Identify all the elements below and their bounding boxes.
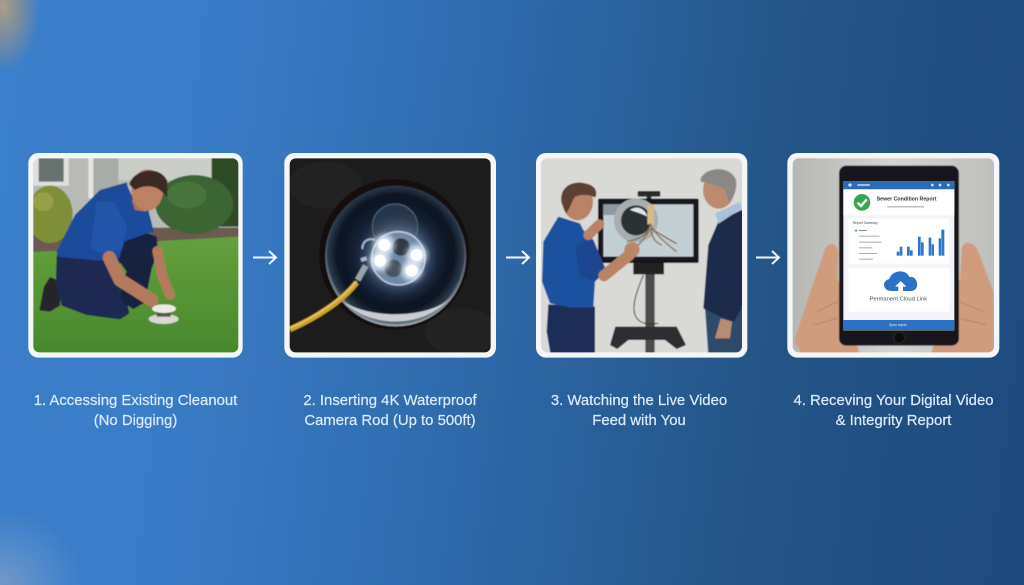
tablet screen: Report Summary (853, 221, 878, 225)
tablet screen (843, 181, 954, 330)
bar chart (897, 230, 944, 256)
caption: step 4: & Integrity Report (836, 413, 951, 429)
caption: step 2 (303, 393, 477, 429)
panel: step 4 digital report on tablet (787, 153, 999, 358)
cloud icon (884, 271, 917, 291)
caption: step 3 (551, 393, 727, 429)
cloud link label: Permanent Cloud Link (869, 297, 927, 303)
tablet body (839, 166, 959, 346)
caption: step 2: Camera Rod (Up to 500ft) (304, 413, 476, 429)
LED lights (370, 235, 427, 281)
shirt (57, 182, 154, 261)
green check (854, 194, 870, 211)
cloud link card (848, 268, 949, 312)
caption: step 4 (793, 393, 994, 429)
summary card (848, 218, 949, 264)
hands (794, 244, 860, 355)
panel: step 2 camera in pipe (284, 153, 498, 358)
tablet screen: Open report (889, 323, 907, 327)
arrow 3 (756, 251, 779, 264)
caption: step 1 (34, 393, 238, 429)
screen header (843, 181, 954, 189)
screen footer (843, 320, 954, 330)
report title: Sewer Condition Report (877, 196, 937, 202)
trousers (56, 255, 129, 319)
client (705, 308, 743, 355)
arrow 1 (253, 251, 276, 264)
caption: step 2: 2. Inserting 4K Waterproof (303, 393, 477, 409)
caption: step 1: (No Digging) (94, 413, 177, 429)
stand (645, 262, 655, 353)
report heading (843, 189, 954, 215)
cleanout cap (149, 314, 179, 324)
process graphic (28, 153, 1000, 358)
panel: step 1 technician accessing cleanout (27, 153, 243, 358)
arms (109, 258, 152, 300)
caption: step 3: Feed with You (592, 413, 686, 429)
cable (290, 282, 357, 329)
caption: step 4: 4. Receving Your Digital Video (793, 393, 994, 409)
head (131, 199, 148, 212)
arrow 2 (506, 251, 529, 264)
boot (39, 277, 61, 312)
technician (547, 304, 595, 355)
monitor (598, 199, 699, 263)
panel: step 3 live video feed (536, 153, 747, 358)
caption: step 3: 3. Watching the Live Video (551, 393, 727, 409)
caption: step 1: 1. Accessing Existing Cleanout (34, 393, 237, 409)
roots (627, 223, 677, 252)
